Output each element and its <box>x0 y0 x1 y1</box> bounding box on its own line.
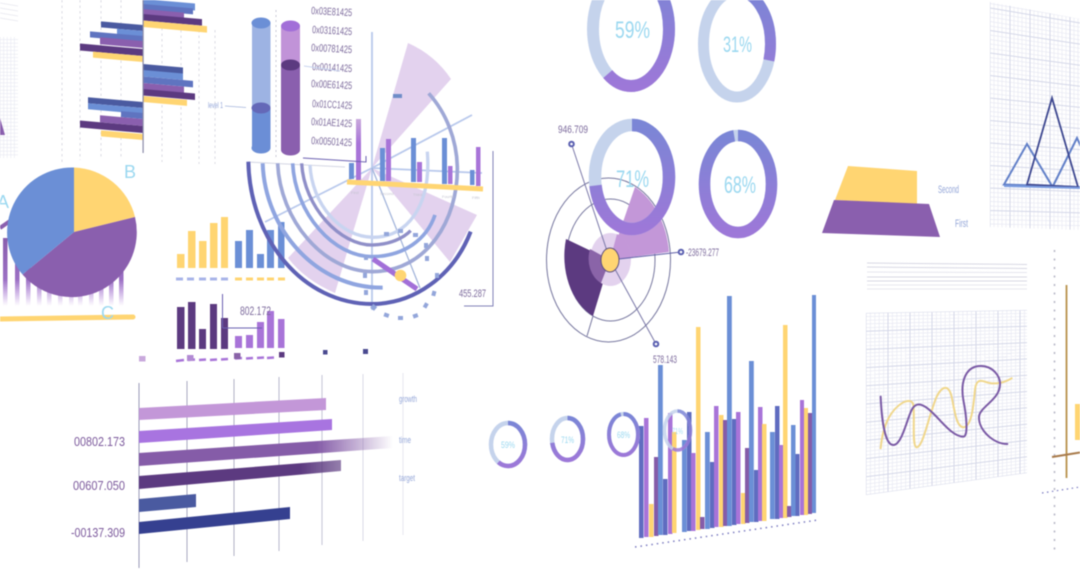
donut: 71%: 71% <box>616 166 649 193</box>
ruled lines <box>867 263 1027 289</box>
donut: 31%: 31% <box>723 32 752 57</box>
bar chart: yellow and blue <box>176 217 285 279</box>
label: level 1: level 1 <box>208 101 223 110</box>
horizontal bar chart: -00137.309 <box>71 525 125 540</box>
horizontal bar chart: 00802.173 <box>74 434 125 449</box>
donut: 59%: 59% <box>615 17 650 44</box>
polar chart markers and labels <box>558 124 719 366</box>
bar chart: purple: 802.172 <box>240 304 271 318</box>
label: level 1 <box>208 101 246 110</box>
polar chart markers and labels: -23679.277 <box>686 247 719 259</box>
grid with triangle chart <box>990 0 1080 232</box>
pie chart with bars: B <box>124 162 136 182</box>
top-left grid fragment <box>0 3 18 158</box>
small donut: 71% over bars: 71% <box>672 427 683 436</box>
small donut: 71% <box>552 418 583 460</box>
bar chart cluster, centre-right <box>635 295 818 547</box>
small donut: 68% <box>609 414 638 455</box>
donut: 68% <box>704 136 772 232</box>
donut: 59% <box>593 0 669 86</box>
bar chart inside radial chart <box>303 119 483 200</box>
polar chart markers and labels: 578.143 <box>653 354 677 366</box>
hex value list: 0x03E81425 <box>311 5 353 19</box>
hex value list: 0x00141425 <box>312 61 353 75</box>
horizontal bar chart <box>71 373 417 568</box>
hex value list: 0x00501425 <box>311 135 353 149</box>
pointer and dot <box>373 259 417 289</box>
pie chart with bars <box>0 162 137 323</box>
radial lines <box>248 32 482 310</box>
cylinders <box>252 10 300 158</box>
hex value list: 0x00781425 <box>311 42 353 56</box>
bar chart inside radial chart: First <box>351 190 360 195</box>
funnel chart: First <box>955 218 968 230</box>
bar chart inside radial chart: Third <box>413 192 422 197</box>
donut: 31% <box>704 0 770 97</box>
concentric arcs <box>248 93 471 304</box>
hex value list: 0x03161425 <box>312 24 353 38</box>
donut: 71% <box>595 125 669 229</box>
small donut: 71%: 71% <box>561 435 574 445</box>
dashed markers <box>363 94 439 320</box>
mirrored bar chart, top left <box>62 0 215 164</box>
small donut: 71% over bars <box>664 411 690 450</box>
polar chart <box>546 144 681 344</box>
horizontal bar chart: 00607.050 <box>73 478 125 493</box>
bar chart: purple <box>139 294 368 362</box>
radial chart <box>248 32 482 320</box>
value callout: 455.287: 455.287 <box>459 288 486 300</box>
pie chart with bars: C <box>101 303 114 323</box>
horizontal bar chart: growth <box>399 394 417 404</box>
grid with line chart <box>866 300 1027 500</box>
funnel chart <box>822 166 968 237</box>
horizontal bar chart: time <box>399 435 411 445</box>
hex value list: 0x01AE1425 <box>311 116 353 130</box>
donut: 68%: 68% <box>724 172 756 199</box>
value callout: 455.287 <box>459 151 493 306</box>
horizontal bar chart: target <box>399 473 415 483</box>
funnel chart: Second <box>938 184 959 196</box>
hex value list <box>311 5 353 149</box>
right-edge axis fragment <box>1042 250 1080 552</box>
faded bars behind pie <box>3 238 124 306</box>
small donut: 68%: 68% <box>617 430 630 440</box>
bar chart inside radial chart: Fifth <box>472 195 480 200</box>
bar chart inside radial chart: Fourth <box>442 194 454 199</box>
pink wedges <box>288 43 477 293</box>
small donut: 59% <box>491 423 525 466</box>
hex value list: 0x00E61425 <box>311 78 353 92</box>
polar chart markers and labels: 946.709 <box>558 124 588 136</box>
bar chart inside radial chart: Second <box>380 191 394 196</box>
small donut: 59%: 59% <box>501 440 515 450</box>
hex value list: 0x01CC1425 <box>312 98 353 112</box>
